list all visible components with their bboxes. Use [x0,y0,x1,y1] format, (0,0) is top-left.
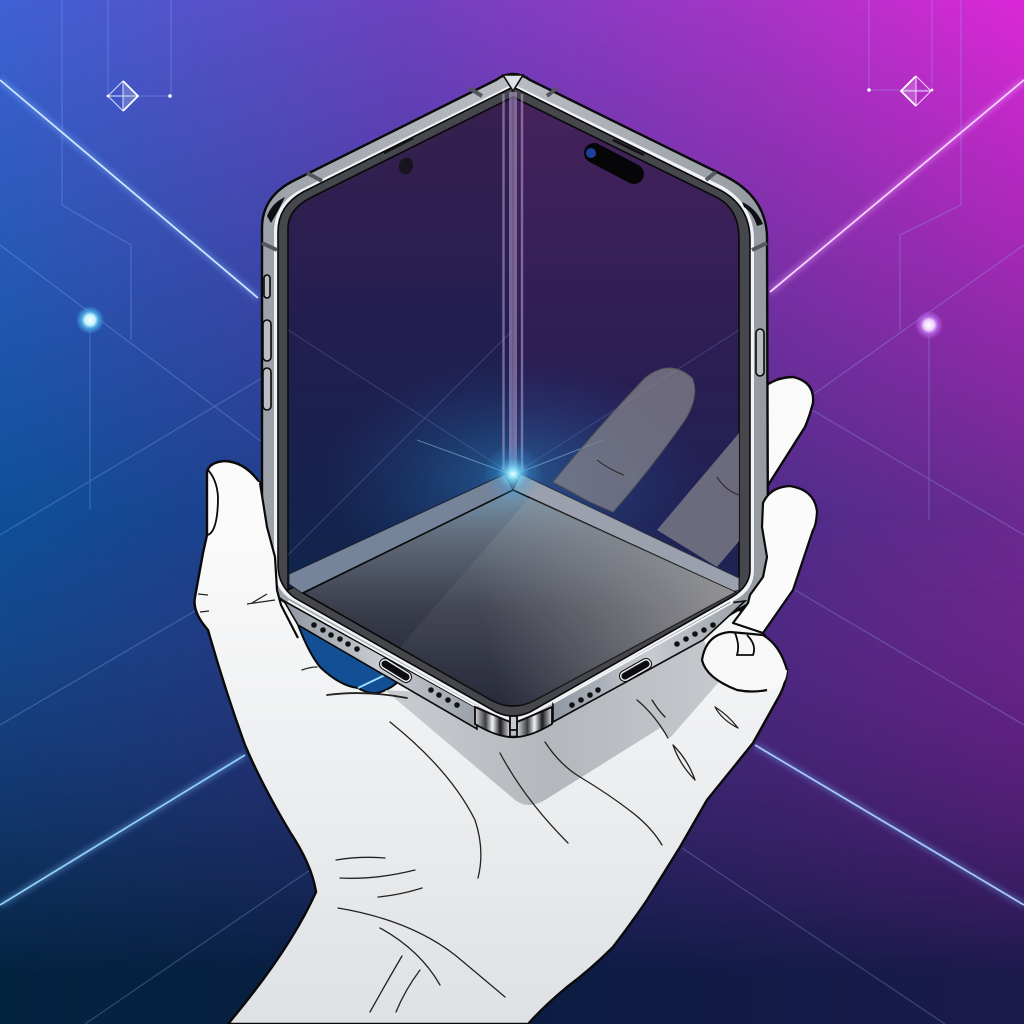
phone: lower right bottom edge with ports [553,601,745,722]
phone: dark corner reflections [267,197,763,226]
phone: bottom hinge corners [475,707,552,737]
finger: lower right overlapping the frame [733,486,817,633]
phone: lower left bottom edge with ports [284,601,477,729]
phone: metal outer frame [262,74,768,737]
phone: dark inner bezel [278,87,750,716]
phone: top speaker slits [384,138,644,155]
phone: left screen panel [288,97,513,590]
thumb tip with nail [702,630,787,692]
phone: left fold strip [289,474,513,593]
lower screen: light wedge reflection [400,497,740,705]
icon: purple glowing node [915,311,943,339]
icon: blue glowing node [76,306,104,334]
hand crease lines [302,667,738,1012]
icon: right circuit diamond [867,76,933,106]
phone: lower screen panel [303,490,735,706]
reflected middle finger [657,432,740,567]
phone: left side buttons [263,275,271,410]
thumb: left thumb overlapping the frame [198,470,298,650]
palm [195,461,787,1024]
phone: white edge highlight [274,84,754,720]
gap between thumb and palm showing background [297,622,400,693]
reflected index finger [553,368,695,512]
screen: reflected fingers [553,368,740,567]
phone: dynamic island camera cutout [586,148,634,174]
phone: frame joint marks and top hinge [262,75,767,250]
center starburst glow [483,444,543,504]
phone: right side button [756,329,764,376]
phone: right screen panel [513,97,739,590]
hand: palm and upper finger [195,377,813,1024]
finger: upper right [760,377,813,490]
icon: left circuit diamond [107,81,172,111]
screen: faint reflected lines [288,330,739,555]
phone shadow on palm [385,640,718,805]
phone: vertical fold crease [504,92,522,478]
phone: right fold strip [513,474,739,594]
screen: wide blue glow around the fold center [358,381,665,530]
phone: front camera hole [397,156,415,176]
